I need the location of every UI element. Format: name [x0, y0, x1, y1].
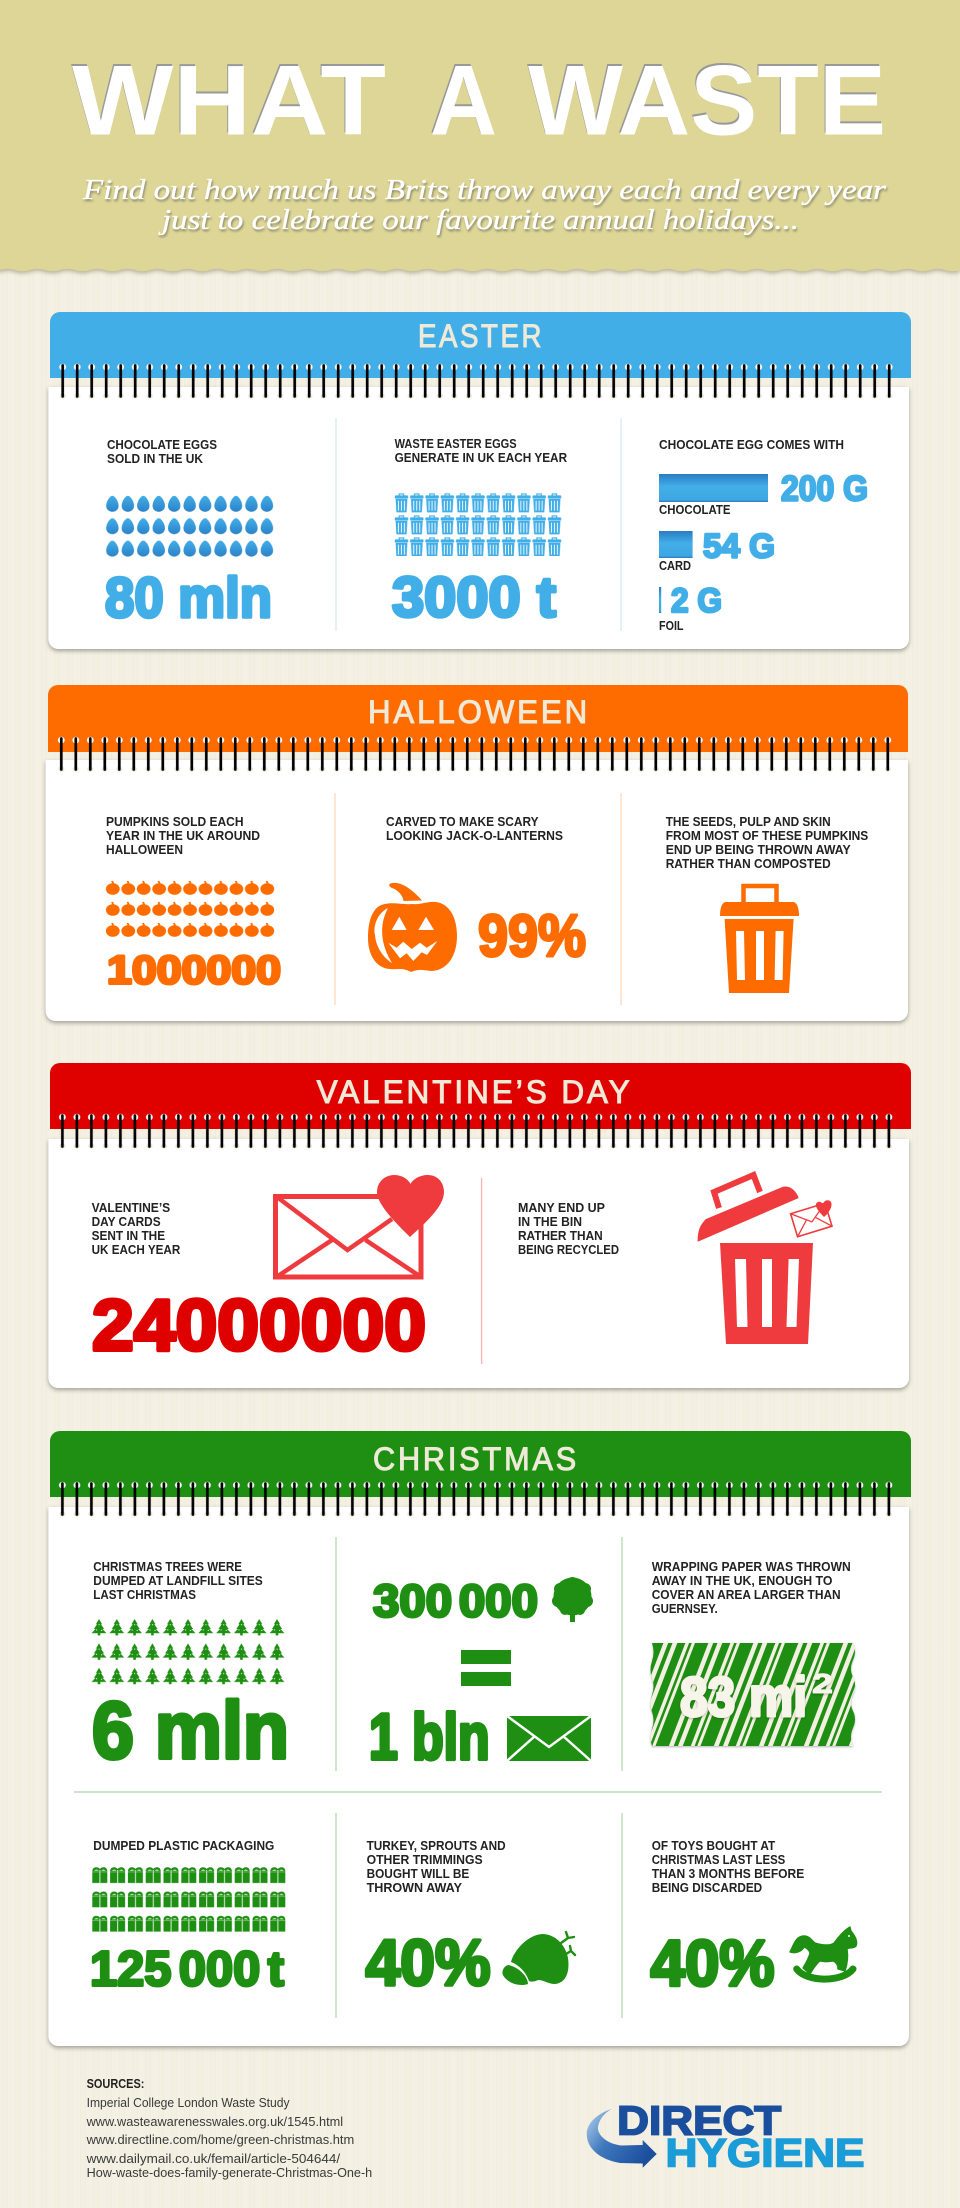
- sources: www.dailymail.co.uk/femail/article-504644/: [86, 2152, 341, 2166]
- sources: [86, 2076, 372, 2180]
- text: dumped plastic packaging: DUMPED PLASTIC PACKAGING: [93, 1838, 274, 1853]
- panel: halloween: [46, 685, 908, 1021]
- easter header band: [50, 312, 911, 378]
- logo wordmark hygiene: HYGIENE: [666, 2132, 864, 2176]
- valentine binding rings: [55, 1114, 896, 1150]
- text: turkey sprouts: [367, 1838, 506, 1895]
- bar: chocolate 200 g: [659, 470, 868, 517]
- halloween header band: [48, 685, 908, 752]
- stat: 3000 t: 3000 t: [392, 566, 556, 630]
- text: valentine's cards sent: SENT IN THE: [92, 1228, 165, 1243]
- text: seeds pulp skin: [666, 814, 869, 871]
- title: [72, 44, 886, 156]
- stat: 300 000 trees: 300 000: [373, 1576, 538, 1626]
- text: many end up: BEING RECYCLED: [518, 1242, 619, 1257]
- christmas binding rings: [55, 1482, 896, 1518]
- text: chocolate eggs sold: SOLD IN THE UK: [107, 451, 204, 466]
- text: pumpkins sold: HALLOWEEN: [106, 842, 183, 857]
- text: turkey sprouts: BOUGHT WILL BE: [367, 1866, 470, 1881]
- text: pumpkins sold: YEAR IN THE UK AROUND: [106, 828, 260, 843]
- text: waste easter eggs: WASTE EASTER EGGS: [395, 436, 517, 451]
- text: chocolate eggs sold: CHOCOLATE EGGS: [107, 437, 217, 452]
- text: christmas trees dumped: DUMPED AT LANDFILL SITES: [93, 1573, 263, 1588]
- text: seeds pulp skin: RATHER THAN COMPOSTED: [666, 856, 831, 871]
- subtitle: [82, 175, 887, 236]
- sources: www.directline.com/home/green-christmas.htm: [86, 2133, 354, 2147]
- valentine heading: VALENTINE’S DAY: [317, 1074, 633, 1110]
- graphic: striped wrapping paper 83 mi2: 2: [812, 1668, 833, 1699]
- valentine header band: [50, 1063, 911, 1129]
- text: carved: CARVED TO MAKE SCARY: [386, 814, 539, 829]
- header banner: [0, 0, 960, 271]
- bar: foil 2 g: FOIL: [659, 618, 684, 633]
- panel: christmas: [48, 1431, 911, 2046]
- equals sign: [461, 1650, 511, 1686]
- text: pumpkins sold: PUMPKINS SOLD EACH: [106, 814, 244, 829]
- stat: 1 bln envelopes: 1 bln: [369, 1700, 490, 1773]
- halloween heading: HALLOWEEN: [368, 694, 590, 730]
- bar: card 54 g: 54 G: [703, 528, 775, 566]
- bar: card 54 g: [659, 528, 775, 573]
- text: valentine's cards sent: [92, 1200, 181, 1257]
- text: many end up: MANY END UP: [518, 1200, 605, 1215]
- icon grid: bins: [394, 493, 562, 556]
- text: seeds pulp skin: THE SEEDS, PULP AND SKIN: [666, 814, 831, 829]
- text: turkey sprouts: TURKEY, SPROUTS AND: [367, 1838, 506, 1853]
- text: many end up: RATHER THAN: [518, 1228, 603, 1243]
- bar: chocolate 200 g: CHOCOLATE: [659, 502, 731, 517]
- text: valentine's cards sent: UK EACH YEAR: [92, 1242, 181, 1257]
- title: WHAT: [72, 44, 386, 156]
- christmas heading: CHRISTMAS: [373, 1441, 579, 1477]
- text: valentine's cards sent: DAY CARDS: [92, 1214, 161, 1229]
- graphic: striped wrapping paper 83 mi2: 83 mi: [680, 1665, 807, 1728]
- text: wrapping paper: WRAPPING PAPER WAS THROWN: [652, 1559, 851, 1574]
- title: WASTE: [528, 44, 886, 156]
- text: wrapping paper: COVER AN AREA LARGER THAN: [652, 1587, 841, 1602]
- icon: tree: [552, 1577, 593, 1622]
- text: christmas trees dumped: [93, 1559, 263, 1602]
- text: toys discarded: CHRISTMAS LAST LESS: [652, 1852, 786, 1867]
- icon grid: trees: [90, 1619, 286, 1685]
- text: many end up: [518, 1200, 619, 1257]
- text: chocolate egg comes with: CHOCOLATE EGG COMES WITH: [659, 437, 844, 452]
- icon grid: gifts: [91, 1867, 287, 1932]
- icon: envelope: [507, 1716, 591, 1761]
- icon grid: eggs: [105, 496, 275, 560]
- text: turkey sprouts: OTHER TRIMMINGS: [367, 1852, 483, 1867]
- sources: www.wasteawarenesswales.org.uk/1545.html: [86, 2115, 343, 2129]
- stat: 40% toys: 40%: [650, 1926, 774, 2000]
- text: valentine's cards sent: VALENTINE’S: [92, 1200, 170, 1215]
- graphic: striped wrapping paper 83 mi2: [650, 1643, 855, 1746]
- stat: 125 000 t: 125 000 t: [90, 1942, 284, 1996]
- easter binding rings: [55, 363, 896, 399]
- logo: direct hygiene: [587, 2098, 864, 2176]
- icon: rocking horse: [790, 1927, 857, 1979]
- text: toys discarded: BEING DISCARDED: [652, 1880, 762, 1895]
- logo arrow: [587, 2109, 657, 2168]
- text: wrapping paper: GUERNSEY.: [652, 1601, 718, 1616]
- text: seeds pulp skin: FROM MOST OF THESE PUMPKINS: [666, 828, 869, 843]
- text: many end up: IN THE BIN: [518, 1214, 582, 1229]
- sources: How-waste-does-family-generate-Christmas-One-h: [87, 2166, 372, 2180]
- text: wrapping paper: [652, 1559, 851, 1616]
- text: pumpkins sold: [106, 814, 260, 857]
- text: toys discarded: THAN 3 MONTHS BEFORE: [652, 1866, 805, 1881]
- icon: turkey: [502, 1932, 575, 1985]
- icon: open bin with envelope: [698, 1175, 832, 1344]
- stat: 6 mln: 6 mln: [92, 1686, 289, 1776]
- stat: 99%: 99%: [478, 903, 586, 969]
- subtitle: Find out how much us Brits throw away each and every year: [82, 175, 887, 206]
- logo wordmark direct: DIRECT: [617, 2098, 781, 2144]
- sources: Imperial College London Waste Study: [87, 2096, 290, 2110]
- icon: jack-o-lantern: [368, 883, 457, 972]
- text: toys discarded: OF TOYS BOUGHT AT: [652, 1838, 775, 1853]
- text: waste easter eggs: [395, 436, 568, 465]
- text: turkey sprouts: THROWN AWAY: [367, 1880, 462, 1895]
- sources: SOURCES:: [87, 2076, 144, 2091]
- bar: foil 2 g: [659, 582, 722, 633]
- christmas header band: [50, 1431, 911, 1497]
- halloween binding rings: [54, 736, 895, 772]
- text: christmas trees dumped: LAST CHRISTMAS: [93, 1587, 196, 1602]
- stat: 24000000: 24000000: [92, 1286, 426, 1366]
- text: christmas trees dumped: CHRISTMAS TREES WERE: [93, 1559, 242, 1574]
- text: wrapping paper: AWAY IN THE UK, ENOUGH TO: [652, 1573, 832, 1588]
- bar: foil 2 g: 2 G: [671, 582, 722, 620]
- text: toys discarded: [652, 1838, 805, 1895]
- text: seeds pulp skin: END UP BEING THROWN AWAY: [666, 842, 851, 857]
- text: carved: [386, 814, 563, 843]
- text: carved: LOOKING JACK-O-LANTERNS: [386, 828, 563, 843]
- stat: 40% food: 40%: [366, 1926, 490, 1999]
- stat: 1 bln envelopes: [369, 1700, 591, 1773]
- text: waste easter eggs: GENERATE IN UK EACH YEAR: [395, 450, 568, 465]
- icon: bin: [720, 886, 799, 993]
- icon grid: pumpkins: [106, 880, 276, 938]
- icon: envelope with heart: [276, 1175, 444, 1277]
- bar: chocolate 200 g: 200 G: [781, 470, 868, 508]
- stat: 1000000: 1000000: [107, 948, 281, 992]
- panel: valentine's day: [48, 1063, 911, 1388]
- bar: card 54 g: CARD: [659, 558, 691, 573]
- easter heading: EASTER: [418, 318, 544, 354]
- subtitle: just to celebrate our favourite annual holidays...: [157, 205, 799, 236]
- text: chocolate eggs sold: [107, 437, 217, 466]
- title: A: [430, 44, 497, 156]
- stat: 80 mln: 80 mln: [105, 566, 272, 630]
- panel: easter: [48, 312, 911, 649]
